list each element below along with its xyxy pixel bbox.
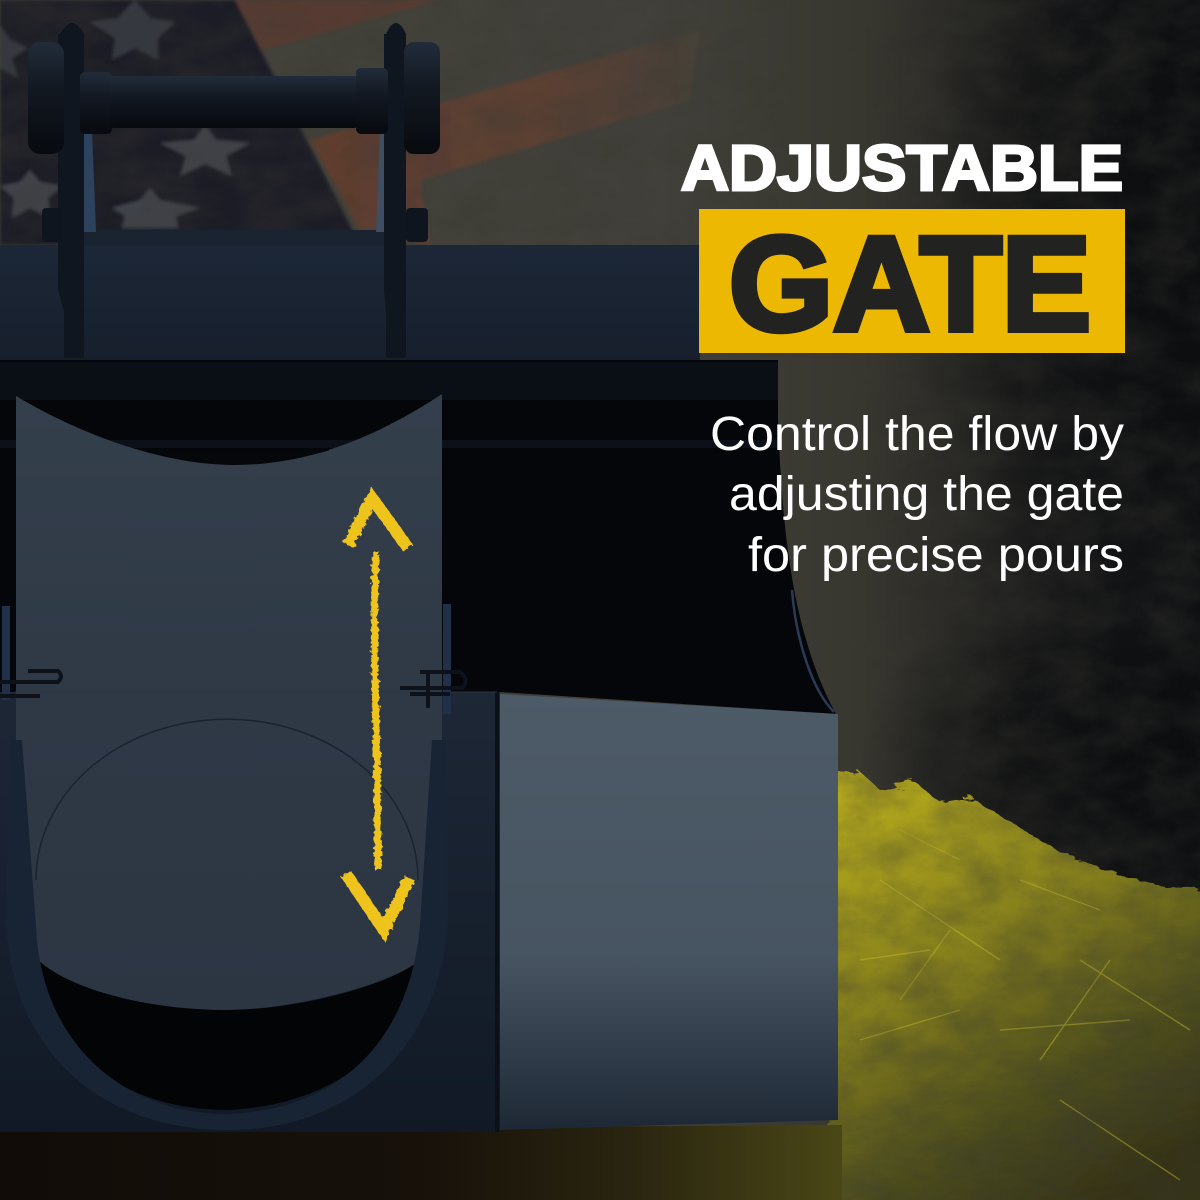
- description text: for precise pours: [748, 529, 1124, 582]
- bucket top beam: [0, 245, 700, 360]
- gate latches: [0, 604, 466, 714]
- description text: [710, 408, 1124, 582]
- floor: [0, 1125, 842, 1200]
- excavator bucket: [0, 23, 838, 1132]
- side panel: [500, 694, 838, 1130]
- title: ADJUSTABLE: ADJUSTABLE: [681, 132, 1123, 204]
- description text: Control the flow by: [710, 408, 1124, 461]
- bucket dark interior: [0, 360, 836, 714]
- title badge: GATE: GATE: [729, 210, 1091, 359]
- description text: adjusting the gate: [729, 468, 1124, 521]
- pin: [80, 72, 112, 134]
- icon: flag stars: [0, 0, 250, 228]
- gate opening shadow: [145, 450, 330, 464]
- background: yellow paint swipe: [830, 768, 1200, 1200]
- bucket lower body: [0, 692, 500, 1132]
- left plate: [58, 23, 84, 358]
- background: American flag: [0, 0, 700, 245]
- gate circular seam: [36, 719, 418, 880]
- U-shaped opening: [6, 740, 448, 1130]
- right plate: [384, 23, 406, 358]
- double-headed arrow: [346, 498, 410, 930]
- adjustable gate plate: [16, 394, 442, 1010]
- hitch bracket with pin: [28, 23, 440, 358]
